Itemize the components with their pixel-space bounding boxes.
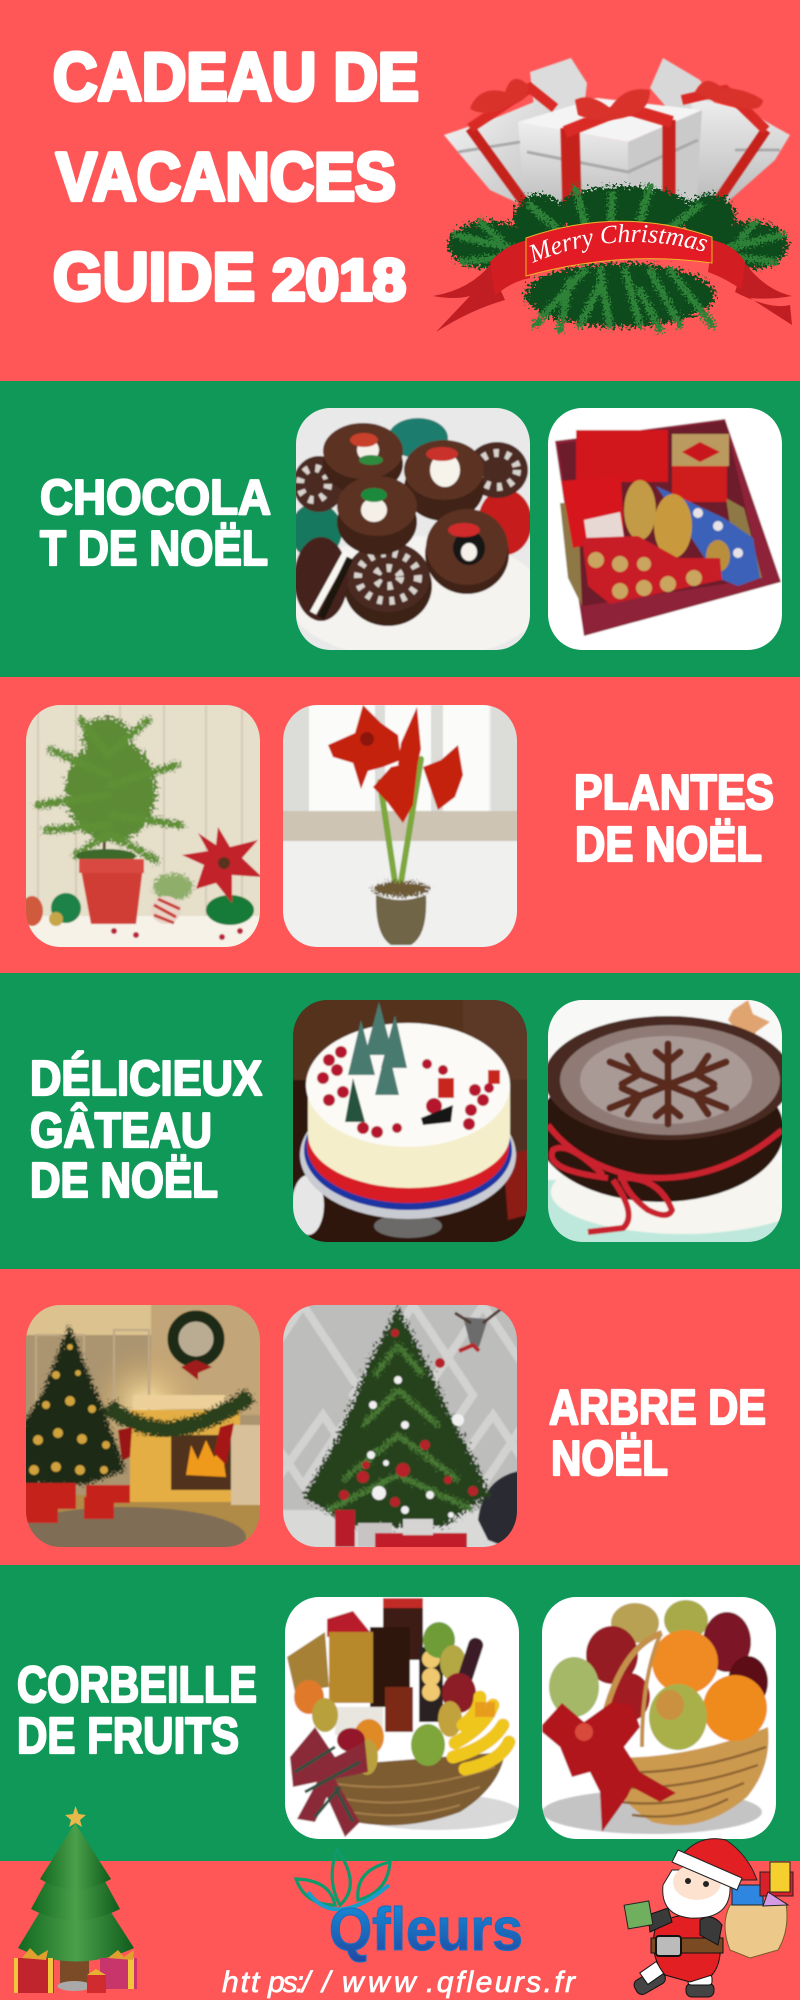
tree xyxy=(303,1305,490,1527)
wreath xyxy=(173,1316,219,1362)
chair xyxy=(477,1470,517,1544)
banner tails xyxy=(433,240,792,332)
tree xyxy=(18,1324,126,1485)
floor xyxy=(57,1494,260,1541)
face xyxy=(673,1864,721,1900)
band: chocolate section xyxy=(0,381,800,677)
stems xyxy=(380,759,421,882)
star xyxy=(65,1806,86,1827)
banner label: Merry Christmas xyxy=(529,224,708,263)
basket xyxy=(315,1752,505,1825)
band: tree section xyxy=(0,1269,800,1565)
photo: amaryllis xyxy=(283,705,517,947)
deer trophy xyxy=(463,1317,488,1347)
section heading: plants xyxy=(574,766,774,872)
boxes xyxy=(287,1632,329,1692)
hat xyxy=(682,1839,757,1880)
fruits xyxy=(294,1622,485,1775)
section heading: plants: PLANTES xyxy=(574,766,774,820)
hand gift xyxy=(624,1901,653,1929)
website url: htt xyxy=(222,1966,261,1999)
section heading: chocolate xyxy=(40,471,271,576)
ribbons xyxy=(470,88,766,208)
gift boxes xyxy=(444,58,790,214)
bows xyxy=(470,79,763,120)
foliage xyxy=(18,1823,134,1962)
decoration: Santa Claus xyxy=(624,1839,793,1997)
stencil snowflake xyxy=(610,1044,726,1124)
pine branches xyxy=(448,186,788,330)
section heading: chocolate: T DE NOËL xyxy=(40,522,268,576)
presents xyxy=(18,1483,130,1523)
band: plants section xyxy=(0,677,800,973)
gifts under tree xyxy=(335,1510,467,1553)
sack gifts xyxy=(732,1885,763,1905)
band: header background xyxy=(0,0,800,381)
eyes xyxy=(685,1878,709,1887)
title: GUIDE xyxy=(53,239,255,315)
fruits xyxy=(549,1600,768,1750)
flowers xyxy=(328,705,463,823)
website url: / xyxy=(320,1966,333,1999)
garland xyxy=(108,1395,251,1430)
presents xyxy=(14,1948,137,1993)
boots xyxy=(632,1967,714,1997)
illustration: Merry Christmas gifts xyxy=(434,57,792,336)
section heading: tree xyxy=(549,1381,766,1486)
section heading: fruit basket xyxy=(17,1656,257,1764)
trunk xyxy=(60,1955,89,1985)
snowflake cookies xyxy=(293,442,528,626)
arms xyxy=(648,1908,672,1932)
website url: w xyxy=(394,1966,418,1999)
decorated cookies xyxy=(323,457,510,595)
photo: decorated Christmas tree xyxy=(283,1305,517,1547)
section heading: chocolate: CHOCOLA xyxy=(40,471,271,525)
plaid bow xyxy=(290,1727,368,1837)
photo: living room with fireplace xyxy=(26,1305,260,1547)
section heading: fruit basket: CORBEILLE xyxy=(17,1656,257,1713)
leaves xyxy=(296,1849,390,1909)
section heading: cake: GÂTEAU xyxy=(30,1103,212,1158)
photo: chocolate snowflake cake xyxy=(548,1000,782,1242)
website url: w xyxy=(342,1966,366,1999)
poinsettia xyxy=(182,827,262,903)
section heading: plants: DE NOËL xyxy=(575,818,762,872)
title: VACANCES xyxy=(56,139,396,215)
section heading: fruit basket: DE FRUITS xyxy=(17,1707,239,1764)
photo: pine and poinsettia xyxy=(26,705,260,947)
website url: w xyxy=(368,1966,392,1999)
title xyxy=(53,39,419,315)
band: fruit basket section xyxy=(0,1565,800,1861)
sack xyxy=(725,1901,787,1958)
cake decorations xyxy=(348,1002,407,1095)
belt xyxy=(651,1938,723,1953)
title: CADEAU DE xyxy=(53,39,419,115)
section heading: tree: ARBRE DE xyxy=(549,1381,766,1435)
title: 2018 xyxy=(272,248,406,313)
section heading: cake xyxy=(30,1052,262,1208)
tree xyxy=(38,715,181,863)
photo: chocolate cookies xyxy=(296,408,530,650)
red ribbon xyxy=(548,1125,782,1232)
photo: Lindt gift box xyxy=(548,408,782,650)
website url: ps:/ xyxy=(267,1966,313,1999)
website url: .qfleurs.fr xyxy=(426,1966,577,1999)
decoration: Christmas tree xyxy=(14,1806,137,1993)
fireplace xyxy=(130,1410,240,1502)
section heading: cake: DÉLICIEUX xyxy=(30,1052,262,1106)
photo: fruit basket with red bow xyxy=(542,1597,776,1839)
band: footer xyxy=(0,1861,800,2000)
basket xyxy=(624,1726,770,1826)
beard xyxy=(663,1870,730,1918)
handle xyxy=(604,1633,662,1717)
logo: Qfleurs xyxy=(296,1849,523,1963)
pot xyxy=(376,895,426,945)
red bow xyxy=(542,1702,676,1832)
banner xyxy=(526,221,712,276)
photo: white Christmas cake xyxy=(293,1000,527,1242)
photo: gourmet basket xyxy=(285,1597,519,1839)
stand xyxy=(298,1130,518,1220)
section heading: tree: NOËL xyxy=(551,1432,668,1486)
body xyxy=(653,1915,720,1982)
legs cuff xyxy=(640,1962,664,1984)
bananas xyxy=(453,1697,509,1769)
wordmark: Qfleurs xyxy=(329,1896,523,1963)
section heading: cake: DE NOËL xyxy=(30,1154,218,1208)
band: cake section xyxy=(0,973,800,1269)
